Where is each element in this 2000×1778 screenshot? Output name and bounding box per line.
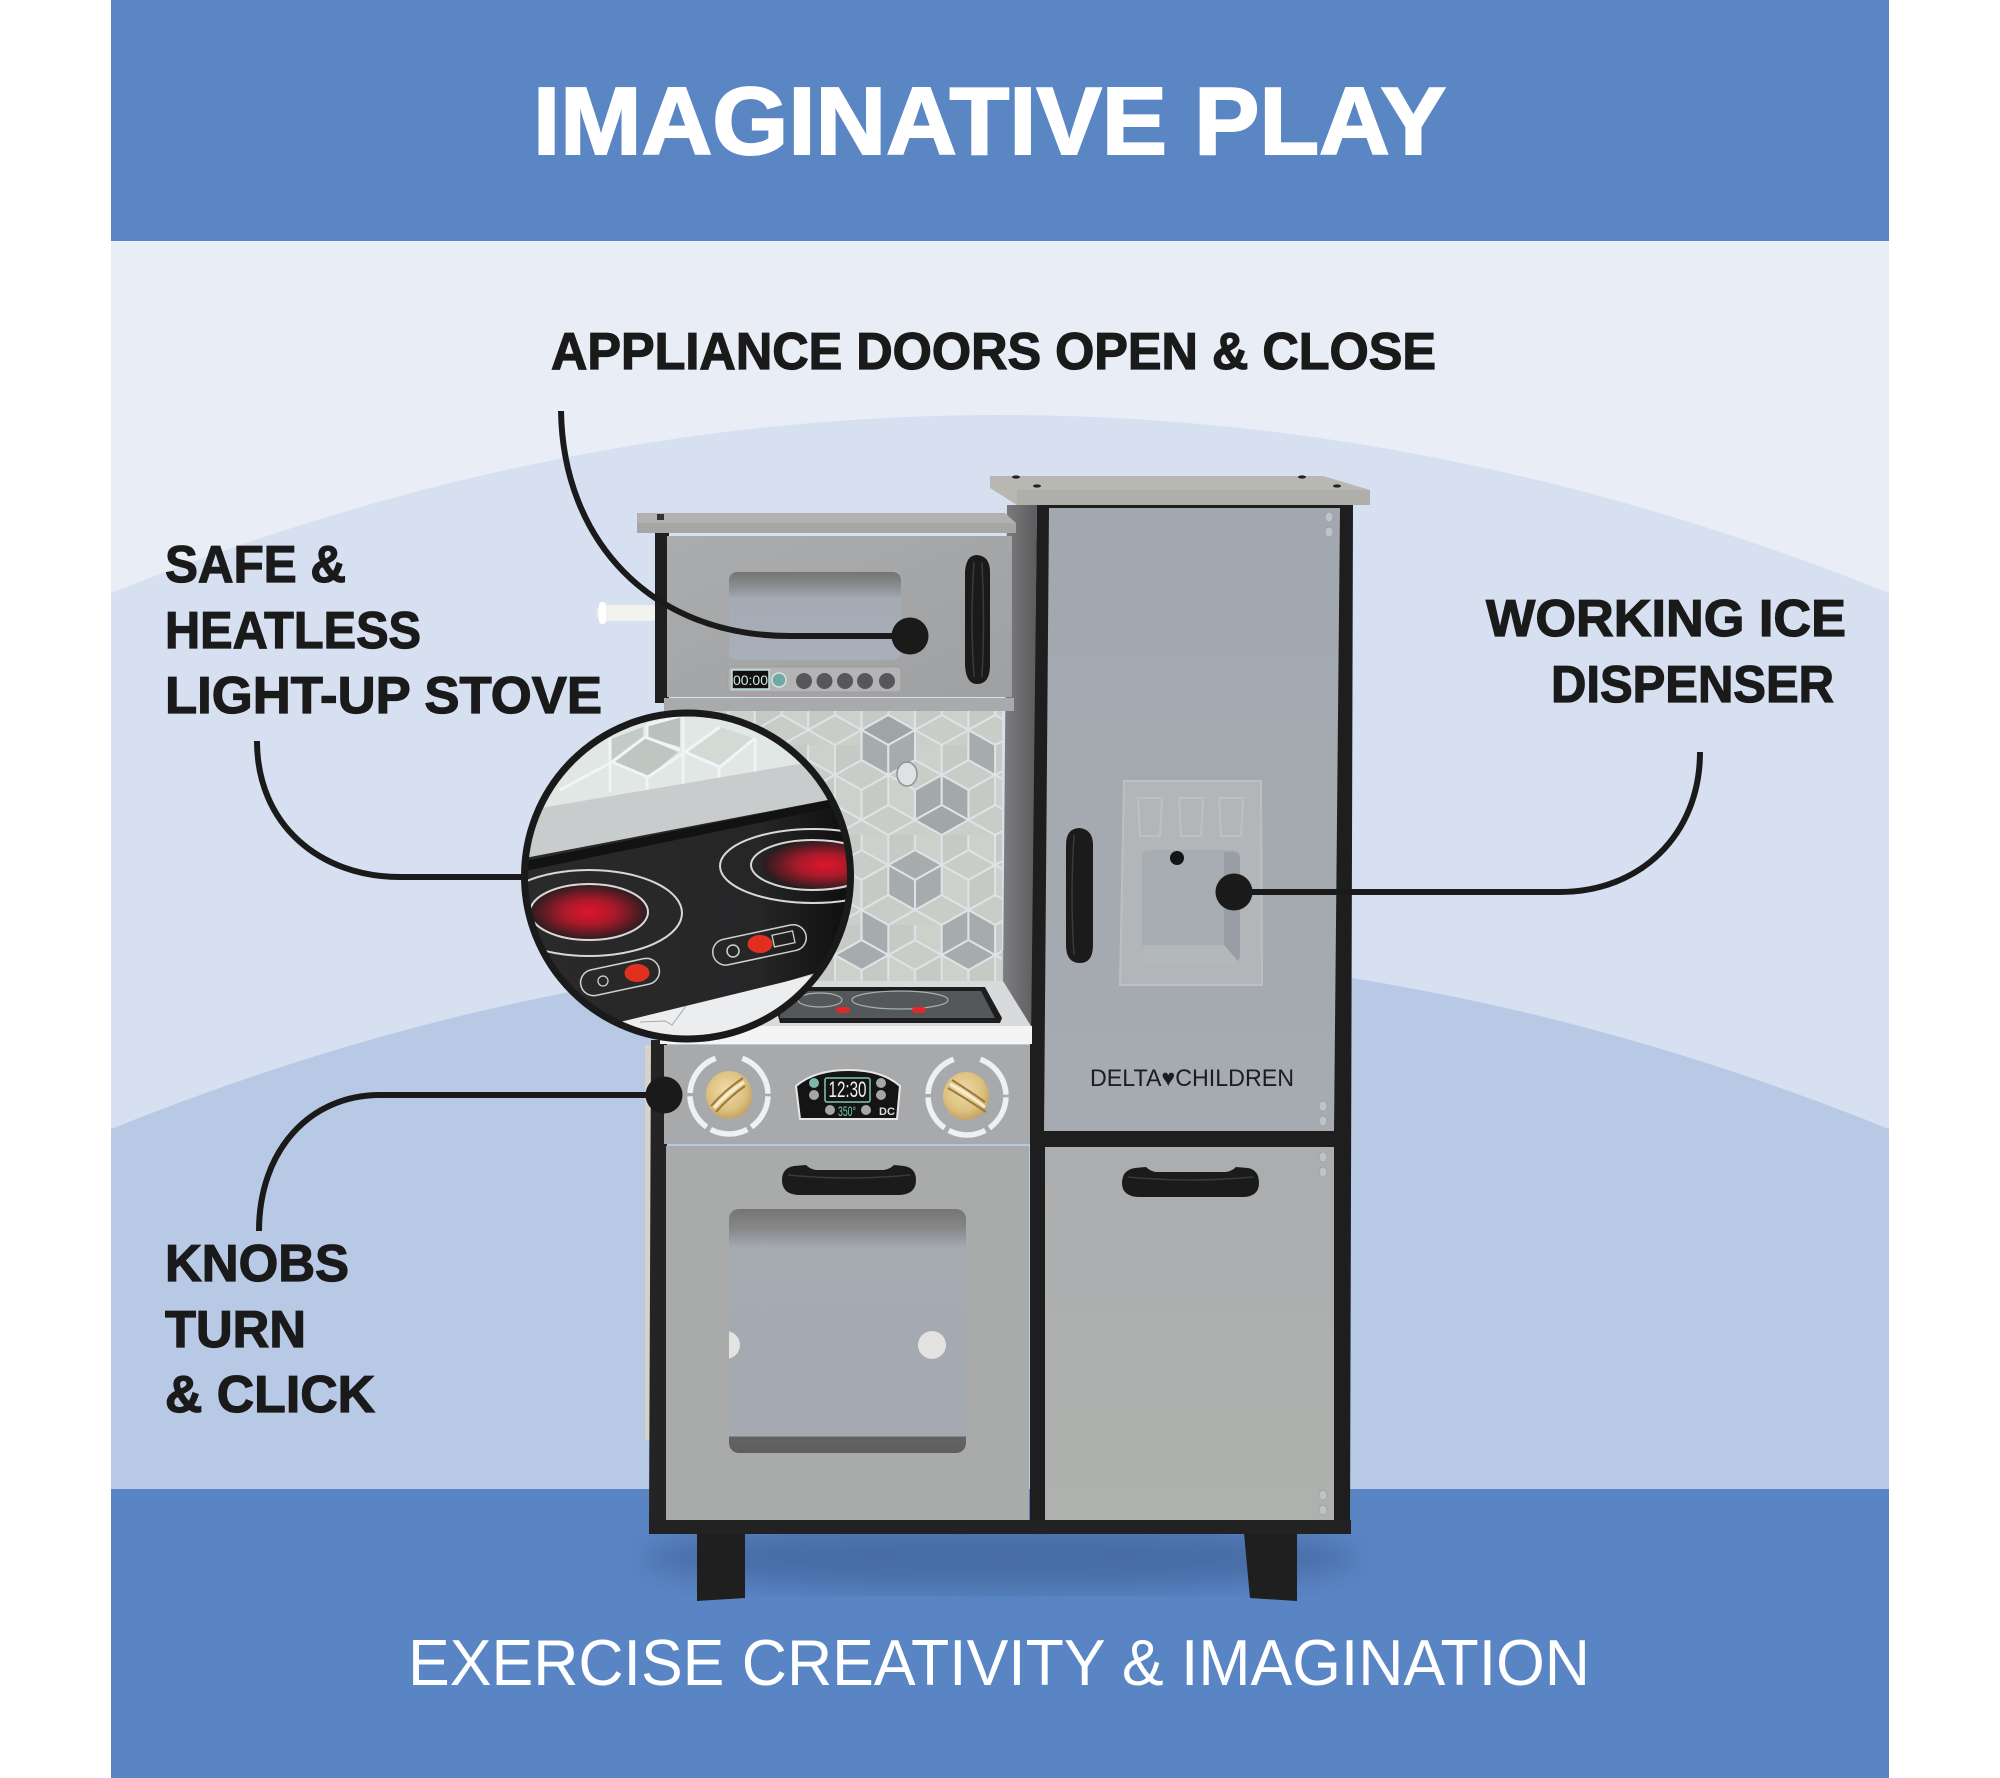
label: knobs turn and click: TURN — [165, 1301, 306, 1359]
panel: background — [111, 241, 1889, 1491]
magnified stove lens — [521, 710, 854, 1042]
ice dispenser — [1120, 781, 1262, 985]
lower cabinet door — [1045, 1147, 1334, 1520]
cabinet frame — [649, 505, 1353, 1534]
lens marble ledge — [529, 764, 828, 857]
title: IMAGINATIVE PLAY — [533, 68, 1446, 175]
oven display: 12:30 — [828, 1077, 866, 1102]
stove top — [660, 981, 1032, 1044]
microwave — [667, 536, 1012, 697]
backsplash — [664, 711, 1002, 981]
label: safe and heatless stove: HEATLESS — [165, 602, 421, 660]
microwave handle — [965, 555, 990, 684]
microwave counter — [637, 513, 1016, 533]
label: knobs turn and click — [165, 1235, 375, 1424]
oven display: 350° — [838, 1103, 856, 1119]
shelf — [664, 698, 1014, 711]
callout line: ice dispenser — [1240, 752, 1700, 892]
left knob — [690, 1056, 768, 1134]
fridge door — [1044, 508, 1340, 1131]
label: working ice dispenser: WORKING ICE — [1486, 590, 1846, 648]
left burner — [528, 869, 683, 957]
kitchen illustration — [597, 475, 1370, 1601]
control panel — [664, 1045, 1030, 1144]
floor shadow — [640, 1526, 1360, 1590]
microwave controls: 00:00 — [733, 672, 768, 688]
callout dot: microwave — [892, 618, 928, 654]
lens cooktop surface — [528, 800, 846, 1022]
side panel and peg — [597, 602, 657, 1440]
fridge top counter — [990, 475, 1370, 505]
lens ring — [524, 713, 850, 1039]
light button — [580, 958, 660, 996]
oven display — [796, 1070, 900, 1119]
label: working ice dispenser: DISPENSER — [1551, 656, 1834, 714]
header band — [111, 0, 1889, 241]
oven door — [666, 1146, 1029, 1520]
label: safe and heatless stove: SAFE & — [165, 536, 346, 594]
label: safe and heatless stove — [165, 536, 602, 725]
label: working ice dispenser — [1486, 590, 1846, 714]
label: appliance doors: APPLIANCE DOORS OPEN & CLOSE — [551, 323, 1436, 381]
rivets — [673, 512, 1333, 1515]
power button — [712, 924, 807, 966]
callout dot: knobs — [646, 1076, 682, 1114]
lower door handle — [1122, 1167, 1259, 1197]
callout line: stove — [257, 741, 530, 877]
label: knobs turn and click: KNOBS — [165, 1235, 349, 1293]
callout line: knobs — [259, 1095, 660, 1231]
footer caption: EXERCISE CREATIVITY & IMAGINATION — [408, 1626, 1590, 1699]
right knob — [928, 1057, 1006, 1135]
microwave window — [729, 572, 901, 660]
lens bottom marble — [622, 975, 812, 1033]
feet — [697, 1533, 1297, 1601]
oven display: DC — [879, 1106, 895, 1118]
callout dot: ice dispenser — [1216, 874, 1252, 910]
label: safe and heatless stove: LIGHT-UP STOVE — [165, 667, 602, 725]
callout line: appliance doors — [561, 411, 905, 636]
lens cooktop rim — [528, 805, 807, 870]
fridge handle — [1066, 828, 1093, 963]
wall light knob — [897, 762, 917, 786]
oven handle — [782, 1165, 916, 1195]
brand logo: DELTA♥CHILDREN — [1090, 1065, 1294, 1092]
lens tile background — [544, 716, 800, 808]
oven window — [712, 1209, 966, 1453]
footer band — [111, 1489, 1889, 1778]
label: knobs turn and click: & CLICK — [165, 1366, 375, 1424]
microwave controls — [728, 667, 901, 692]
right burner — [719, 828, 847, 904]
